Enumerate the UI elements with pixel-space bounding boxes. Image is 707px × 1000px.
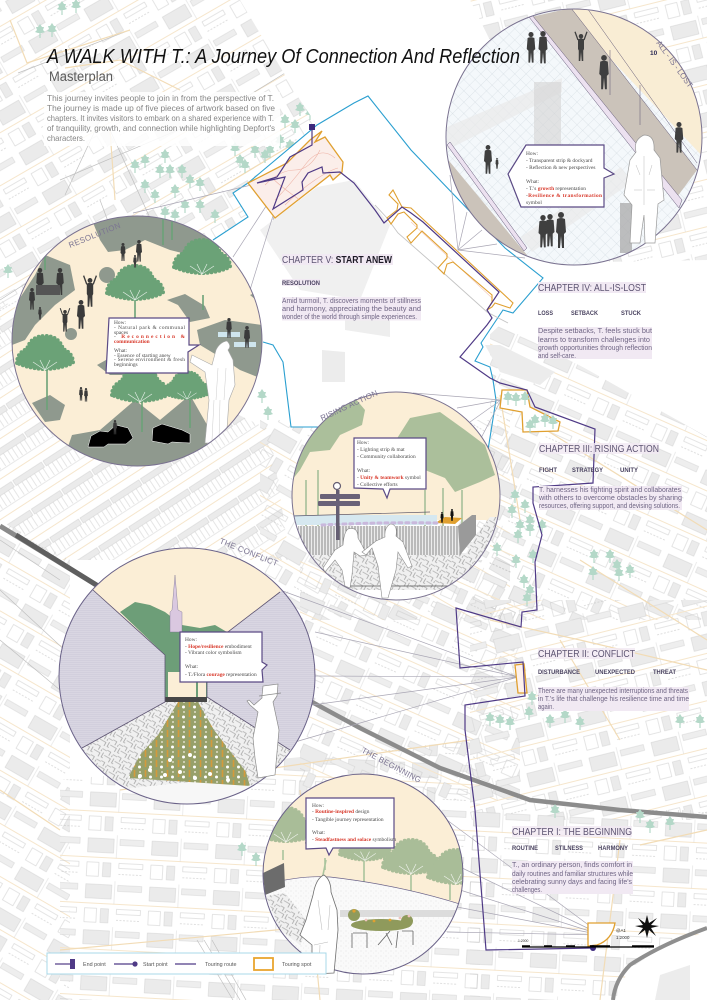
touring spot: rising action green: [500, 390, 560, 433]
chapter i text: celebrating sunny days and facing life's: [512, 879, 632, 886]
callout: [306, 798, 397, 855]
callout: -Resilience & transformation: [526, 193, 602, 199]
circle: the beginning: [262, 774, 464, 974]
legend: touring route: Touring route: [205, 962, 236, 968]
chapter iv text: [538, 282, 652, 360]
chapter iii text: T. harnesses his fighting spirit and collaborates: [539, 487, 681, 494]
start point marker: [590, 945, 596, 951]
figures: [484, 31, 683, 248]
subtitle: Masterplan: [49, 69, 113, 84]
chapter iv text: and self-care.: [538, 353, 576, 360]
touring spot: beginning: [588, 923, 615, 946]
white figure in coat: [624, 135, 664, 243]
circle: all-is-lost: [440, 5, 707, 275]
legend: end point: [55, 959, 106, 969]
chapter ii text: again.: [538, 704, 554, 711]
chapter v text: wonder of the world through simple experiences.: [281, 314, 417, 321]
touring spot: conflict: [515, 664, 527, 693]
legend: [47, 953, 326, 974]
legend: end point: End point: [83, 962, 106, 968]
circle label: rising action: RISING ACTION: [319, 388, 379, 423]
callout: beginnings: [114, 362, 138, 368]
intro text: characters.: [47, 133, 85, 143]
white figures of children: [323, 524, 412, 598]
callout: How:: [114, 320, 126, 326]
callout: [180, 632, 267, 682]
callout: [106, 318, 199, 373]
chapter iv text: LOSS: [538, 310, 553, 317]
chapter v text: and harmony, appreciating the beauty and: [282, 306, 421, 313]
callout: - Hope/resilience embodiment: [185, 644, 252, 650]
intro text: of tranquility, growth, and connection while highlighting Depfort's: [47, 123, 275, 133]
chapter i text: daily routines and familiar structures while: [512, 871, 633, 878]
callout: What:: [357, 468, 371, 474]
callout: - Routine-inspired design: [312, 809, 370, 815]
legend: start point: Start point: [143, 962, 168, 968]
callout: - Unity & teamwork symbol: [357, 475, 421, 481]
circle: conflict: [58, 548, 316, 804]
chapter iii text: FIGHT: [539, 467, 557, 474]
chapter i text: challenges.: [512, 887, 542, 894]
callout: - Reflection & new perspectives: [526, 164, 595, 171]
callout: - Steadfastness and solace symbolism: [312, 837, 397, 843]
route site boundary line: [213, 96, 543, 450]
chapter iii text: STRATEGY: [572, 467, 604, 474]
end point marker: [309, 124, 315, 130]
callout: - Collective efforts: [357, 481, 398, 488]
intro text: This journey invites people to join in from the perspective of T.: [47, 93, 274, 103]
signpost: [318, 482, 360, 540]
chapter iii text: [538, 443, 682, 510]
chapter i text: HARMONY: [598, 845, 629, 852]
site area: blank central ground: [213, 0, 707, 437]
white figure with top hat: [247, 684, 281, 778]
circle label: the beginning: THE BEGINNING: [360, 746, 423, 785]
scale bar: 1:2000: [518, 939, 528, 943]
chapter iv text: growth opportunities through reflection: [538, 345, 652, 352]
flower tables: [348, 909, 413, 948]
chapter ii text: in T.'s life that challenge his resilience time and time: [538, 696, 689, 703]
chapter iii text: with others to overcome obstacles by sharing: [538, 495, 682, 502]
callout: - Reconnection &: [114, 334, 186, 340]
callout: - Serene environment & fresh: [114, 356, 185, 363]
legend: touring spot: Touring spot: [282, 962, 312, 968]
callout: How:: [185, 637, 197, 643]
chapter v text: CHAPTER V: START ANEW: [282, 254, 392, 266]
legend: touring spot: [254, 958, 312, 970]
callout: How:: [312, 803, 324, 809]
chapter i text: STILNESS: [555, 845, 583, 852]
chapter iv text: SETBACK: [571, 310, 598, 317]
chapter i text: ROUTINE: [512, 845, 538, 852]
chapter iii text: CHAPTER III: RISING ACTION: [539, 443, 659, 455]
callout: What:: [114, 348, 128, 354]
chapter ii text: There are many unexpected interruptions and threats: [538, 688, 688, 695]
legend: start point: [114, 961, 168, 968]
chapter v text: [281, 254, 421, 321]
callout: - Transparent strip & dockyard: [526, 158, 593, 164]
title: A WALK WITH T.: A Journey Of Connection And Reflection: [46, 46, 520, 68]
chapter iii text: UNITY: [620, 467, 639, 474]
chapter i text: CHAPTER I: THE BEGINNING: [512, 826, 632, 838]
callout: - Community collaboration: [357, 454, 416, 460]
chapter iv text: CHAPTER IV: ALL-IS-LOST: [538, 282, 646, 294]
chapter v text: Amid turmoil, T. discovers moments of stillness: [282, 298, 421, 305]
chapter ii text: DISTURBANCE: [538, 669, 580, 676]
callout: [354, 438, 426, 498]
callout: spaces: [114, 330, 128, 336]
callout: - Essence of starting anew: [114, 352, 171, 359]
white figure of woman: [190, 341, 235, 443]
chapter iv text: learns to transform challenges into: [538, 337, 650, 344]
callout: communication: [114, 339, 150, 345]
scale label: @A1: [616, 928, 626, 933]
chapter ii text: THREAT: [653, 669, 676, 676]
callout: - Vibrant color symbolism: [185, 650, 242, 656]
callout: - T.'s growth representation: [526, 186, 586, 192]
callout: - T./Flora courage representation: [185, 672, 257, 678]
callout: - Natural park & communal: [114, 325, 186, 331]
touring spot: resolution park: [248, 131, 343, 218]
touring route: [257, 128, 595, 950]
callout: How:: [526, 151, 538, 157]
callout: What:: [312, 830, 326, 836]
intro text: chapters. It invites visitors to embark on a shared experience with T.: [47, 113, 274, 123]
sight lines from touring spots to circles: [133, 175, 602, 935]
circle: resolution: [12, 215, 265, 470]
legend: touring route: [175, 962, 236, 968]
chapter v text: RESOLUTION: [282, 280, 320, 287]
circle: rising action: [292, 392, 500, 604]
chapter ii text: UNEXPECTED: [595, 669, 635, 676]
callout: [508, 145, 614, 207]
chapter iii text: resources, offering support, and devising solutions.: [539, 503, 680, 510]
intro text: The journey is made up of five pieces of artwork based on five: [47, 103, 275, 113]
callout: - Tangible journey representation: [312, 817, 384, 823]
page number: 10: [650, 50, 658, 57]
chapter i text: T., an ordinary person, finds comfort in: [512, 862, 632, 869]
scale label: 1:2000: [616, 935, 630, 940]
circle label: resolution: RESOLUTION: [67, 221, 122, 250]
chapter i text: [512, 826, 633, 894]
icon: north arrow: [635, 915, 659, 938]
chapter ii text: CHAPTER II: CONFLICT: [538, 648, 635, 660]
chapter iv text: STUCK: [621, 310, 641, 317]
chapter iv text: Despite setbacks, T. feels stuck but: [538, 328, 652, 335]
touring spot: all-is-lost dockyard strip: [375, 190, 513, 323]
white figure of woman with bag: [300, 875, 338, 974]
intro text: [44, 92, 280, 146]
chapter ii text: [538, 648, 689, 711]
circle label: all-is-lost: ALL - IS - LOST: [654, 39, 695, 90]
scale bar: [518, 939, 654, 947]
callout: How:: [357, 440, 369, 446]
circle label: the conflict: THE CONFLICT: [218, 537, 279, 568]
callout: - Lighting strip & mat: [357, 447, 405, 453]
callout: symbol: [526, 200, 542, 206]
callout: What:: [185, 664, 199, 670]
callout: What:: [526, 179, 540, 185]
